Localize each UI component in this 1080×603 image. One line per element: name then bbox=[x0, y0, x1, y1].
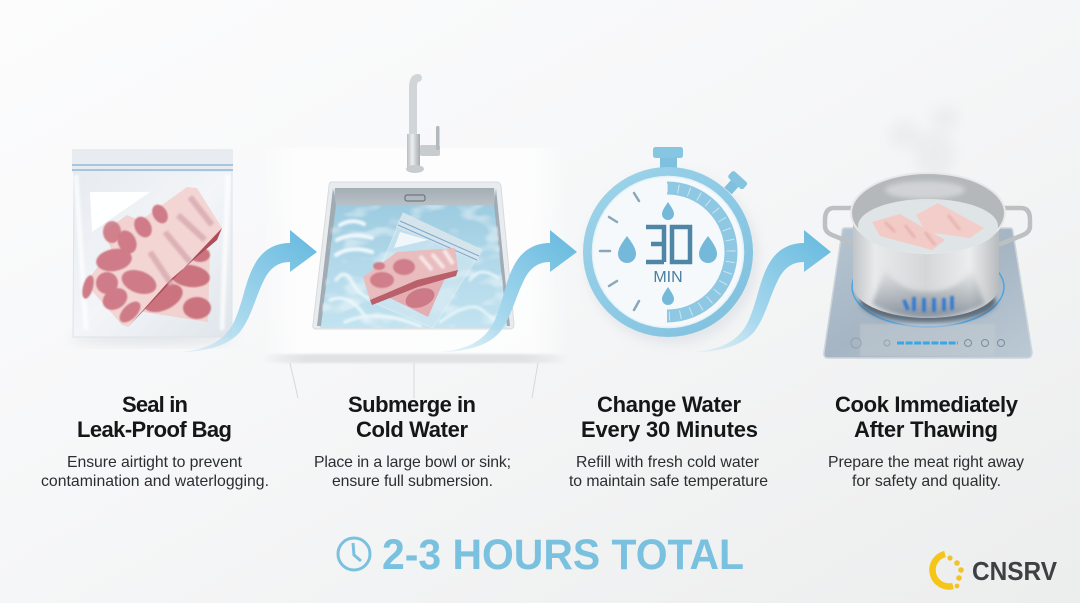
logo mark bbox=[932, 554, 964, 588]
step 2 heading: Submerge in bbox=[348, 392, 476, 417]
step 2 heading bbox=[348, 392, 476, 442]
logo: CNSRV bbox=[932, 554, 1058, 588]
arrow: step 1 to step 2 bbox=[180, 230, 317, 352]
step 4 description: Prepare the meat right away bbox=[828, 454, 1024, 471]
side walls bbox=[317, 188, 510, 326]
step 4 heading: Cook Immediately bbox=[835, 392, 1019, 417]
step 1 description: Ensure airtight to prevent bbox=[67, 454, 243, 471]
bag body bbox=[73, 170, 232, 337]
water drops bbox=[618, 202, 717, 305]
logo wordmark: CNSRV bbox=[972, 556, 1058, 586]
cooktop plate bbox=[824, 228, 1032, 358]
icon: cooking pot bbox=[825, 173, 1030, 318]
meat in pot bbox=[872, 203, 984, 250]
arrow: step 2 to step 3 bbox=[440, 230, 577, 352]
step 1 description bbox=[41, 454, 269, 490]
back slab of ribs bbox=[103, 215, 211, 322]
progress arc bbox=[667, 188, 731, 316]
sink rim bbox=[313, 182, 514, 329]
watch shadow bbox=[586, 172, 758, 344]
icon: clock bbox=[338, 538, 370, 570]
digital 30 readout bbox=[646, 227, 690, 262]
step 3 description bbox=[569, 454, 768, 490]
submerged meat bbox=[388, 278, 445, 317]
step 1 description: contamination and waterlogging. bbox=[41, 473, 269, 490]
controls bbox=[851, 338, 1004, 348]
front slab of ribs bbox=[80, 187, 222, 327]
step 4 heading bbox=[835, 392, 1019, 442]
bag shadow bbox=[70, 332, 234, 344]
step 3 heading: Every 30 Minutes bbox=[581, 417, 758, 442]
step 4 description bbox=[828, 454, 1024, 490]
hour ticks bbox=[600, 193, 639, 310]
bag highlight bbox=[90, 192, 150, 232]
pot rim and interior bbox=[851, 173, 1005, 253]
bag zip strip bbox=[72, 149, 233, 172]
right handle bbox=[993, 208, 1030, 247]
icon: stopwatch bbox=[586, 147, 758, 344]
step 3 heading bbox=[581, 392, 758, 442]
icon: sealed bag with meat bbox=[70, 149, 234, 344]
step 1 heading: Leak-Proof Bag bbox=[77, 417, 232, 442]
icon: faucet bbox=[406, 78, 440, 173]
step 2 description: ensure full submersion. bbox=[332, 473, 493, 490]
water ripples bbox=[320, 205, 508, 329]
step 1 heading: Seal in bbox=[122, 392, 188, 417]
panel: kitchen counter bbox=[262, 148, 568, 398]
arrow: step 3 to step 4 bbox=[694, 230, 831, 352]
step 4 description: for safety and quality. bbox=[852, 473, 1001, 490]
step 1 heading bbox=[77, 392, 232, 442]
flame reflection bbox=[872, 268, 985, 318]
water surface bbox=[858, 199, 998, 253]
outer ring bbox=[588, 172, 748, 332]
pot body bbox=[853, 215, 999, 318]
step 4 heading: After Thawing bbox=[854, 417, 998, 442]
steam bbox=[889, 106, 959, 179]
step 3 heading: Change Water bbox=[597, 392, 741, 417]
step 3 description: Refill with fresh cold water bbox=[576, 454, 759, 471]
MIN label: MIN bbox=[653, 269, 683, 286]
left handle bbox=[825, 208, 862, 247]
submerged bag bbox=[363, 213, 482, 328]
step 2 description: Place in a large bowl or sink; bbox=[314, 454, 511, 471]
step 2 heading: Cold Water bbox=[356, 417, 468, 442]
burner glow ring bbox=[852, 247, 1004, 327]
icon: sink with water and bag bbox=[313, 182, 514, 329]
total time banner bbox=[338, 531, 744, 579]
step 2 description bbox=[314, 454, 511, 490]
side button bbox=[721, 170, 748, 198]
step 3 description: to maintain safe temperature bbox=[569, 473, 768, 490]
icon: induction cooktop bbox=[824, 228, 1032, 358]
water bbox=[320, 205, 507, 328]
total time text: 2-3 HOURS TOTAL bbox=[382, 531, 744, 579]
crown bbox=[660, 156, 677, 170]
sink back wall bbox=[333, 188, 496, 206]
